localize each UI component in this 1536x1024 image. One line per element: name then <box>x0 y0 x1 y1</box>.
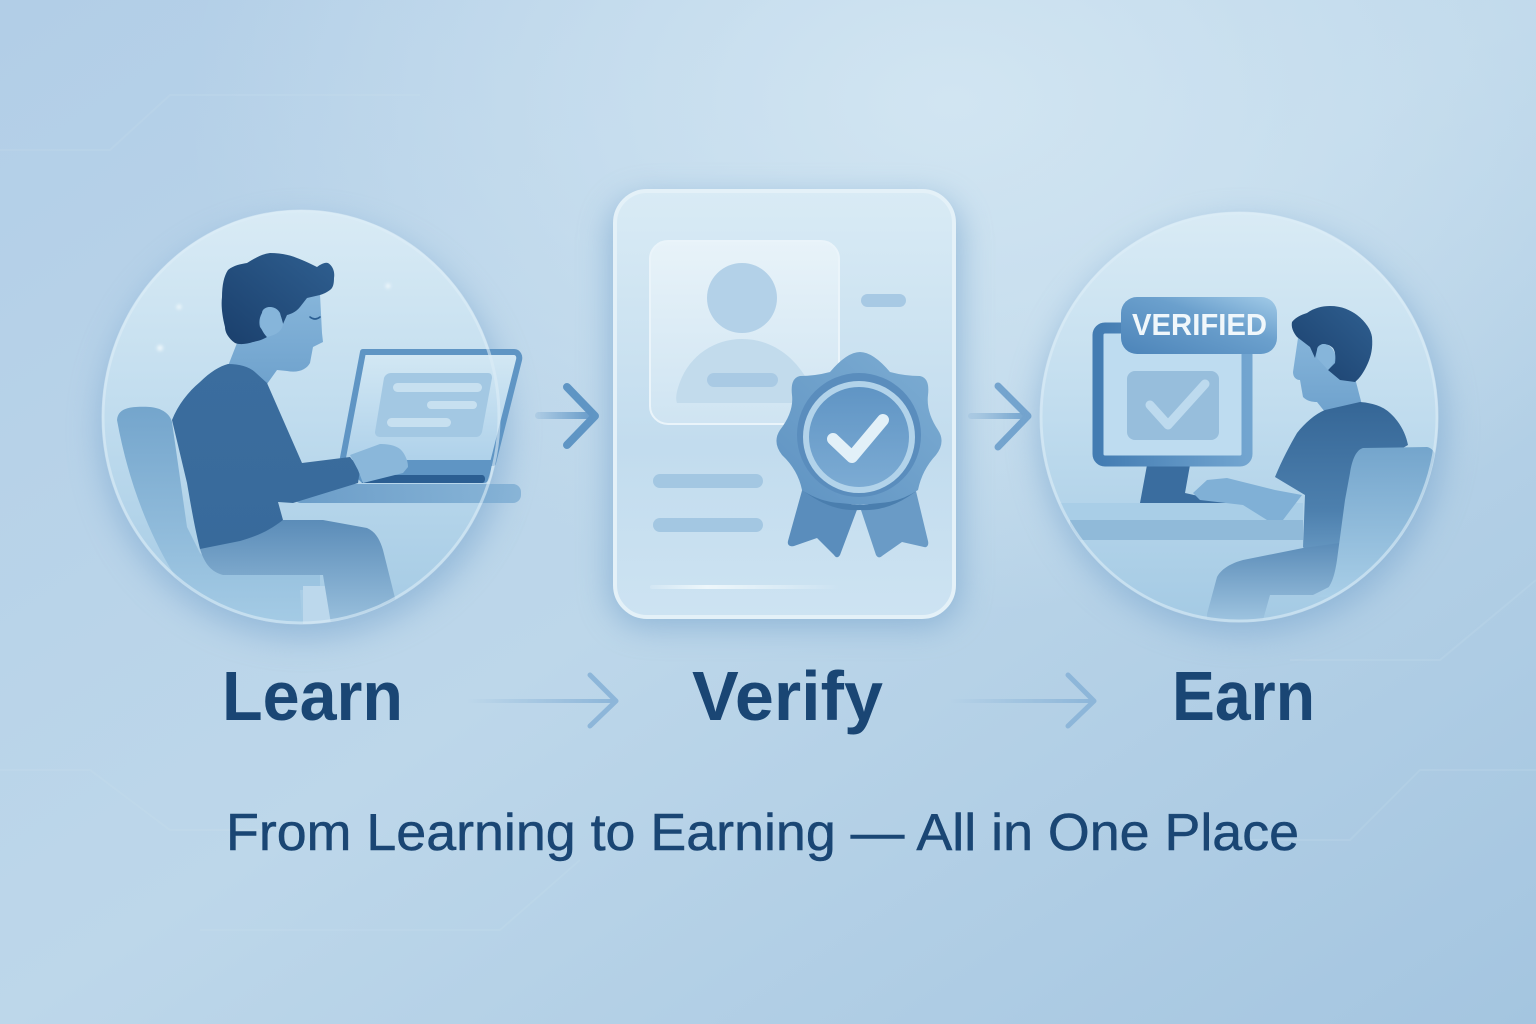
desk <box>293 484 521 503</box>
disc shadow <box>1038 222 1446 634</box>
rosette shadow <box>805 480 915 510</box>
label: Verify: Verify <box>692 657 883 735</box>
panel: earn <box>1038 212 1446 634</box>
chair <box>117 406 320 600</box>
ribbon seal <box>776 352 942 557</box>
screen lines <box>387 383 482 427</box>
stool post <box>303 586 331 626</box>
avatar head <box>707 263 777 333</box>
seal dark ring <box>797 373 921 497</box>
legs <box>200 520 398 630</box>
laptop <box>342 352 519 483</box>
torso <box>172 364 360 549</box>
chair <box>1329 447 1434 596</box>
hair <box>222 253 334 344</box>
arrow: label learn to verify <box>467 675 616 726</box>
ear <box>1320 344 1334 370</box>
tagline: From Learning to Earning — All in One Place <box>226 804 1299 862</box>
avatar shoulders <box>676 339 810 403</box>
verified badge <box>1121 297 1277 354</box>
desk top <box>1060 503 1303 520</box>
hand <box>350 444 408 483</box>
keyboard bar <box>362 475 485 483</box>
earn disc <box>1040 212 1438 622</box>
earn illustration <box>1060 297 1437 620</box>
verified badge: VERIFIED <box>1132 307 1267 342</box>
label: Earn: Earn <box>1172 657 1315 735</box>
eye <box>310 317 320 319</box>
card shadow <box>610 198 960 626</box>
arrow: learn to verify <box>535 387 595 445</box>
avatar bar <box>707 373 778 387</box>
left ribbon <box>788 487 858 557</box>
bottom highlight <box>650 585 840 589</box>
torso <box>1275 402 1408 548</box>
rosette front <box>776 352 942 505</box>
check <box>833 420 883 457</box>
ear <box>260 307 283 337</box>
monitor stand <box>1140 465 1230 503</box>
neck and face <box>1293 335 1362 412</box>
photo panel <box>650 241 839 424</box>
neck and face <box>228 294 323 384</box>
screen check <box>1150 384 1205 425</box>
learn disc <box>102 210 500 624</box>
screen card <box>375 373 492 437</box>
small dash <box>861 294 906 307</box>
screen check box <box>1127 371 1219 440</box>
disc rim <box>1041 213 1437 621</box>
text lines <box>653 474 763 532</box>
laptop base <box>342 463 492 483</box>
panel: verify <box>610 191 960 626</box>
label: Learn: Learn <box>222 657 403 735</box>
legs <box>1207 548 1330 619</box>
arm and hand <box>1193 478 1302 520</box>
certificate card <box>615 191 954 617</box>
arrow: verify to earn <box>968 386 1028 447</box>
hair <box>1292 306 1372 382</box>
panel: learn <box>100 210 521 640</box>
sparkles <box>157 284 390 351</box>
monitor <box>1098 328 1247 461</box>
disc rim <box>103 211 499 623</box>
learn seated figure lower <box>117 407 398 640</box>
desk front <box>1070 520 1303 540</box>
arrow: label verify to earn <box>950 675 1094 726</box>
seal light ring <box>806 384 912 490</box>
disc shadow <box>100 222 508 638</box>
right ribbon <box>860 487 928 557</box>
laptop lid <box>342 352 519 463</box>
